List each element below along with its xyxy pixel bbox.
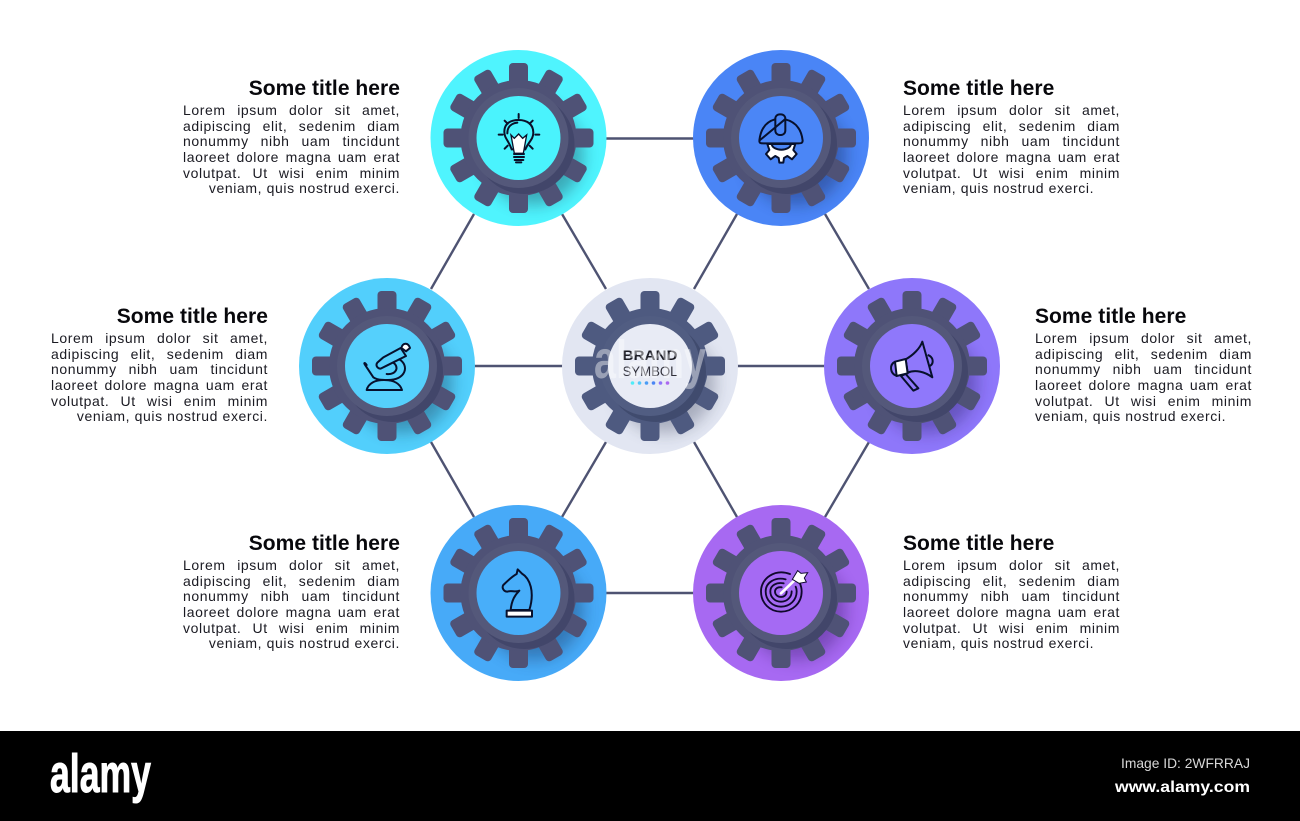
icon: helmet and gear: [759, 114, 803, 163]
icon: megaphone: [891, 342, 933, 391]
body text: [183, 558, 400, 651]
heading: Some title here: [1035, 305, 1186, 328]
text block: middle right: [1035, 305, 1252, 424]
text block: bottom right: [903, 532, 1120, 651]
icon: target: [761, 571, 808, 612]
heading: Some title here: [903, 532, 1054, 555]
watermark: alamy: [594, 330, 706, 390]
connector lines: [431, 138, 869, 593]
node: microscope gear: [299, 278, 475, 454]
heading: Some title here: [249, 532, 400, 555]
body text: [51, 331, 268, 424]
footer bar: [0, 731, 1300, 821]
node: helmet gear: [693, 50, 869, 226]
body text: [903, 103, 1120, 196]
text block: bottom left: [183, 532, 400, 651]
text block: middle left: [51, 305, 268, 424]
node: megaphone gear: [824, 278, 1000, 454]
heading: Some title here: [903, 77, 1054, 100]
footer logo: alamy: [50, 744, 151, 804]
website: www.alamy.com: [1114, 779, 1250, 796]
icon: lightbulb: [499, 114, 539, 162]
node: chess knight gear: [430, 505, 606, 681]
body text: [183, 103, 400, 196]
node: lightbulb gear: [430, 50, 606, 226]
text block: top right: [903, 77, 1120, 196]
node: brand gear: [562, 278, 738, 454]
icon: microscope: [364, 344, 410, 390]
heading: Some title here: [117, 305, 268, 328]
node: target gear: [693, 505, 869, 681]
image id: Image ID: 2WFRRAJ: [1121, 755, 1250, 771]
brand symbol logo: [622, 347, 678, 385]
text block: top left: [183, 77, 400, 196]
brand symbol logo: BRAND: [622, 347, 678, 363]
body text: [903, 558, 1120, 651]
heading: Some title here: [249, 77, 400, 100]
brand symbol logo: SYMBOL: [622, 363, 678, 379]
icon: chess knight: [503, 569, 532, 617]
body text: [1035, 331, 1252, 424]
